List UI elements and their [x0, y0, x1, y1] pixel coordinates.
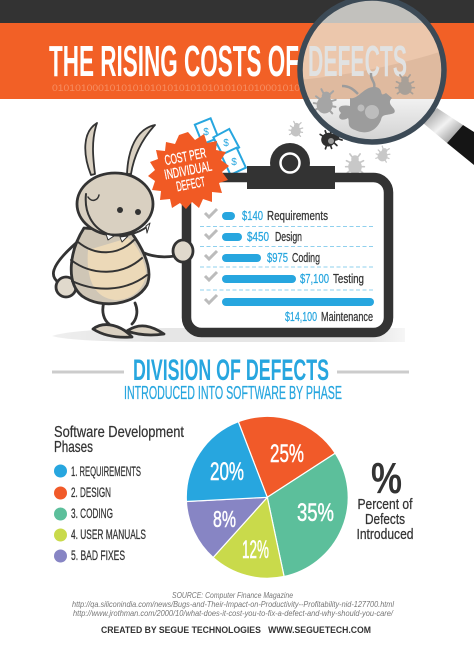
lens rim [300, 0, 444, 142]
pie labels: 25% [270, 440, 304, 468]
feet [93, 325, 132, 337]
clipboard [186, 143, 388, 332]
check marks [205, 209, 217, 303]
percent key: Introduced [356, 526, 414, 543]
magnified bugs [312, 88, 338, 115]
legend: 2. DESIGN [71, 485, 111, 500]
dashed row dividers [200, 226, 373, 290]
cost labels: $7,100 [300, 272, 329, 286]
legend items [54, 464, 67, 478]
cost labels: $140 [242, 209, 263, 223]
pie labels: 12% [242, 536, 269, 564]
header band [0, 0, 474, 99]
badge text: COST PER [163, 144, 207, 168]
cost labels: $450 [247, 230, 269, 244]
sources: http://qa.siliconindia.com/news/Bugs-and-Their-Impact-on-Productivity--Profitability-nid-127700.html [72, 600, 394, 609]
cost bars [222, 212, 374, 306]
binary strip: 0101010001010101010101010101010101010001010 [52, 83, 300, 94]
cost labels: Coding [292, 251, 320, 265]
antennae [85, 123, 97, 175]
pie labels: 20% [210, 458, 244, 486]
percent key: % [371, 454, 402, 503]
head [77, 173, 153, 235]
legend: Phases [54, 439, 93, 456]
starburst badge [148, 132, 229, 209]
percent key: Percent of [358, 496, 413, 513]
cost labels: $14,100 [285, 310, 317, 324]
pie labels [210, 440, 334, 564]
magnifying glass [298, 0, 474, 165]
left arm and hand [53, 238, 82, 283]
legend title: Software Development [54, 424, 184, 441]
face [86, 194, 148, 236]
lens contents [298, 0, 446, 145]
section heading [52, 354, 409, 403]
pie labels: 8% [213, 506, 236, 532]
cost labels: Testing [333, 272, 364, 286]
handle [423, 108, 463, 143]
legend: 1. REQUIREMENTS [71, 464, 141, 479]
right arm [138, 250, 175, 257]
body stripes [71, 240, 147, 289]
legend: 3. CODING [71, 506, 113, 521]
legend: 5. BAD FIXES [71, 548, 125, 563]
badge text [160, 144, 216, 196]
pie chart [186, 416, 348, 578]
money bills: $ [231, 157, 237, 168]
section heading: DIVISION OF DEFECTS [133, 354, 329, 387]
cost labels: Design [275, 230, 302, 244]
teeth [106, 223, 150, 242]
pie labels: 35% [297, 499, 334, 527]
cost labels: Requirements [267, 209, 328, 223]
money bills: $ [223, 138, 229, 149]
money bills: $ [203, 127, 209, 138]
right hand [173, 240, 193, 262]
legend [54, 424, 184, 563]
badge text: INDIVIDUAL [163, 158, 213, 182]
cost labels: $975 [267, 251, 288, 265]
sources: http://www.jrothman.com/2000/10/what-does-it-cost-you-to-fix-a-defect-and-why-should-you-care/ [73, 609, 394, 618]
small bugs [288, 121, 392, 174]
cost labels [242, 209, 373, 324]
ground shadow [52, 328, 405, 342]
badge text: DEFECT [175, 173, 207, 194]
sources: SOURCE: Computer Finance Magazine [172, 591, 293, 600]
credit line: CREATED BY SEGUE TECHNOLOGIES WWW.SEGUETECH.COM [101, 625, 371, 636]
sources [72, 591, 394, 618]
body [71, 228, 149, 304]
cost labels: Maintenance [321, 310, 373, 324]
character: bug mascot [53, 123, 193, 337]
percent key [356, 454, 414, 543]
legend: 4. USER MANUALS [71, 527, 146, 542]
money bills [195, 118, 246, 175]
legs [103, 302, 137, 324]
percent key: Defects [365, 511, 405, 528]
